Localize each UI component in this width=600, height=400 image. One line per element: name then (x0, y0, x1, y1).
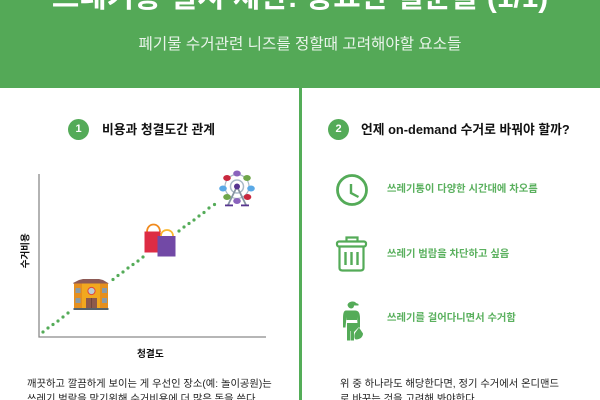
heading 2: 언제 on-demand 수거로 바꿔야 할까? (361, 122, 570, 137)
chart axes (39, 174, 266, 337)
number badge 1: 1 (75, 123, 82, 135)
icon: trash bin (337, 238, 366, 270)
criterion 1: 쓰레기통이 다양한 시간대에 차오름 (387, 184, 538, 195)
heading 1: 비용과 청결도간 관계 (102, 122, 215, 137)
number badge 1 (68, 119, 89, 140)
dotted trend line (41, 203, 216, 334)
y axis label: 수거비용 (20, 233, 31, 268)
body text left: 깨끗하고 깔끔하게 보이는 게 우선인 장소(예: 놀이공원)는 (27, 379, 272, 390)
criterion 2: 쓰레기 범람을 차단하고 싶음 (387, 248, 509, 260)
header band (0, 0, 600, 88)
x axis label: 청결도 (137, 349, 164, 360)
number badge 2 (328, 119, 349, 140)
icon: worker with bag (343, 301, 363, 340)
subtitle: 폐기물 수거관련 니즈를 정할때 고려해야할 요소들 (139, 36, 461, 53)
icon: ferris wheel (219, 170, 255, 206)
panel: cost vs cleanliness (20, 119, 272, 400)
number badge 2: 2 (335, 123, 342, 135)
panel: on-demand switch (328, 119, 570, 400)
icon: shopping bags (144, 224, 176, 256)
body text left (27, 378, 272, 400)
body text right (340, 378, 559, 400)
column divider (299, 88, 302, 400)
icon: school building (73, 279, 109, 310)
criterion 3: 쓰레기를 걸어다니면서 수거함 (387, 313, 516, 324)
icon: clock (338, 176, 366, 204)
body text right: 위 중 하나라도 해당한다면, 정기 수거에서 온디맨드 (340, 379, 559, 390)
